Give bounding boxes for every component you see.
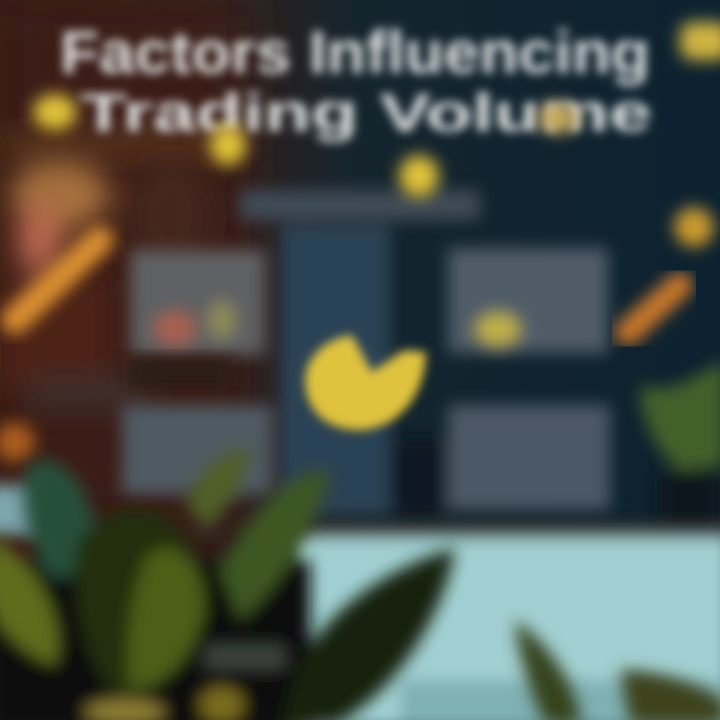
plant at right	[640, 360, 720, 525]
yellow pie chart icon	[305, 335, 426, 430]
dark gap	[395, 440, 445, 515]
foreground plant leaves	[0, 449, 720, 720]
board panel: upper right	[448, 248, 608, 353]
heading: Factors Influencing	[60, 19, 650, 86]
small reddish accent in left panel	[153, 310, 197, 346]
board top bar	[240, 190, 480, 220]
dot: heading middle	[210, 125, 246, 165]
dot: left panel	[207, 300, 237, 340]
dot: top right	[680, 22, 720, 60]
dot: right panel	[474, 311, 522, 347]
board panel: upper left	[130, 250, 265, 355]
orange arm stroke left	[15, 240, 100, 320]
dot: above board	[399, 155, 439, 197]
heading: Trading Volume	[80, 83, 652, 143]
board panel: lower right	[448, 405, 610, 510]
dot: heading right	[538, 103, 578, 133]
orange arrow right	[628, 285, 680, 332]
board panels	[122, 190, 610, 515]
dot: right	[674, 207, 714, 247]
dark shelf below left panel	[130, 358, 230, 386]
board panel: lower left	[122, 405, 272, 495]
heading	[60, 19, 652, 143]
board panel: centre column	[280, 225, 390, 515]
character figure on left	[0, 160, 210, 410]
table surface	[0, 485, 720, 720]
orange spot lower left	[0, 422, 35, 462]
yellow dots	[33, 22, 720, 347]
dot: heading left	[33, 94, 77, 130]
